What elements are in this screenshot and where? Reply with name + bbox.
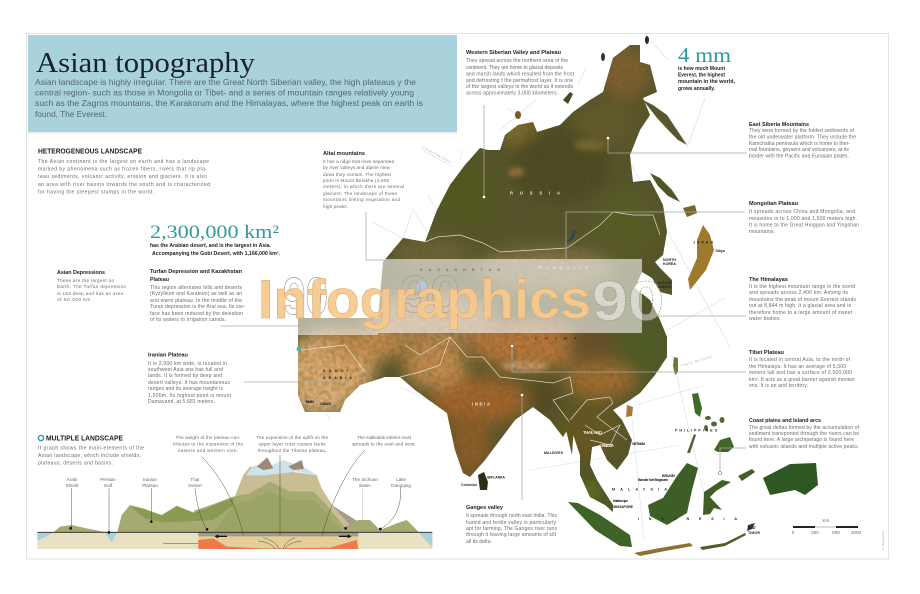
text block: East Siberia Mountains: the old underwater platform. They include the [749,134,856,140]
text block: Mongolian Plateau: Mongolian Plateau [749,201,798,207]
text block: Asian Depressions [57,270,126,302]
text block: Asian Depressions: of 50,000 km. [57,297,92,302]
map labels: RUSSIA [510,190,560,196]
intro text: central region- such as those in Mongolia or Tibet- and a series of mountain ranges relatively young [35,88,414,98]
callout: 4 mm: Everest, the highest [678,72,725,78]
text block: Ganges valley: It spreads through north east India. This [466,513,558,519]
borders and rivers [300,212,660,445]
text block: Turfan Depression: This region alternates hills and deserts [150,285,242,291]
text block: East Siberia Mountains [749,122,856,160]
scale bar [792,518,862,535]
text block: The Himalayas: water bodies. [749,316,781,322]
text block: heterogeneous landscape: marked by phenomena such as frozen fibers, rivers that rip pla- [38,166,207,172]
map labels: SINGAPORE [613,505,634,509]
text block: Western Siberian Valley and Plateau: and defrosting f the permafrost layer. It is one [466,78,573,84]
cross-section labels: Thar [190,477,200,482]
map labels [305,145,760,535]
text block: The Himalayas: out at 8,844 m high. It a glacial area and is [749,303,852,309]
text block: Ganges valley [466,505,558,545]
text block: Western Siberian Valley and Plateau: across approximately 3,000 kilometers. [466,90,558,96]
map labels: INDIA [472,402,490,406]
text block: Iranian Plateau: lands. It is formed by deep and [148,373,222,379]
panel: multiple landscape [37,435,432,549]
callouts: spreads to the east and west. [352,442,416,446]
text block: Iranian Plateau: southwest Asia ans has full arid [148,367,223,373]
heading: multiple landscape: MULTIPLE LANDSCAPE [46,436,123,442]
map labels: KAZAKHSTAN [420,268,500,272]
text block: Ganges valley: humid and fertile valley is particularly [466,520,556,526]
text block: Asian Depressions: Asian Depressions [57,270,105,276]
text block: East Siberia Mountains: East Siberia Mountains [749,122,809,128]
text block: Altai mountains: by river valleys and alpine mea- [323,165,391,170]
text block: Ganges valley: apt for farming. The Ganges river runs [466,526,558,532]
text block: Coast plains and Island arcs: sediment transported through the rivers can be [749,431,859,437]
text block: Turfan Depression: of its waters to irrigation canals. [150,317,226,323]
map labels: VIETNAM [632,442,645,446]
text block: Turfan Depression: Turfan Depression and Kazakhstan [150,269,243,275]
text block: Turfan Depression: Plateau [150,277,169,283]
text block: Altai mountains: dows they contain. The highest [323,172,392,177]
text block: Turfan Depression: (Kyzylkum and Karakum) as well as an [150,291,242,297]
text block: The Himalayas: therefore home to a large amount of sweet [749,310,853,316]
callout: 4 mm: grows annually. [678,86,716,92]
text block: heterogeneous landscape: The Asian continent is the largest on earth and has a landscape [38,159,209,165]
text block: Mongolian Plateau: measures in to 1,000 and 1,500 meters high. [749,216,857,222]
icon: teal bullet [38,435,44,441]
callout: 4 mm: 4 mm [678,43,731,67]
leader lines [221,105,747,500]
callouts: throughout the Tibetan plateau. [258,448,326,453]
text block: Coast plains and Island arcs: Coast plains and Island arcs [749,418,821,424]
map labels: Trópico de Cáncer [680,354,714,368]
intro text: found, The Everest. [35,109,107,119]
callout: 2,300,000 km2: has the Arabian desert, and is the largest in Asia. [150,243,272,249]
text block: Tibet Plateau: meters tall and has a surface of 2,500,000 [749,370,852,376]
text block: Western Siberian Valley and Plateau [466,50,575,96]
text block: East Siberia Mountains: mal fountains, geysers and volcanoes, at its [749,147,850,153]
cross-section labels: Iranian [143,477,157,482]
map labels: MONGOLIA [538,265,588,270]
callout: 4 mm: is how much Mount [678,66,725,72]
text block: Ganges valley: through it leaving large amounts of silt [466,532,557,538]
callouts [173,435,416,453]
text block: Coast plains and Island arcs: The great deltas formed by the accumulation of [749,425,860,431]
text block: heterogeneous landscape: HETEROGENEOUS LANDSCAPE [38,148,142,156]
text block: Western Siberian Valley and Plateau: They spread across the northern area of the [466,58,568,64]
map labels: CAMBODIA [600,443,614,448]
cross-section labels: Shield [66,483,79,488]
text block: Iranian Plateau: Iranian Plateau [148,352,188,358]
description: Asian landscape, which include shields, [38,453,141,459]
map labels: YEMEN [305,400,314,404]
text block: heterogeneous landscape [38,148,210,196]
map labels: CHINA [535,336,577,340]
text block: Coast plains and Island arcs [749,418,860,450]
text block: Tibet Plateau: Tibet Plateau [749,350,784,356]
map labels: MALAYSIA [612,488,667,492]
cross-section labels: The Sichuan [352,477,378,482]
cross-section labels: Gulf [104,483,113,488]
text block: Altai mountains: high peaks. [323,204,348,209]
cross-section labels: Desert [188,483,202,488]
text block: East Siberia Mountains: border with the Pacific and Eurasian plates. [749,154,849,160]
callouts: The weight of the plateau con- [176,435,241,440]
map labels: KOREA [663,262,676,266]
text block: Turfan Depression [150,269,245,323]
text block: East Siberia Mountains: Kamchatka peninsula which is home to ther- [749,141,850,147]
text block: Western Siberian Valley and Plateau: continent. They are home to glacial deposits [466,65,564,71]
text block: Altai mountains: It has a ridge that rises separated [323,159,394,164]
text block: Tibet Plateau: ons. It is an arid territory. [749,383,808,389]
map labels: Círculo Polar Ártico [422,145,452,164]
text block: Iranian Plateau: desert valleys. It has mountainous [148,380,230,386]
cross-section labels: Persian [100,477,116,482]
callouts: tributes to the expansion of the [173,442,243,446]
description [38,446,144,466]
text block: Iranian Plateau: ranges and its average height is [148,386,224,392]
callouts: The malleable inferior crust [357,435,412,440]
map labels: BRUNEI [662,474,675,478]
scale bar: Km [823,518,830,523]
intro text [35,77,423,119]
callout: 2,300,000 km2: 2,300,000 km² [150,222,279,243]
map labels: PHILIPPINES [675,428,718,432]
callouts: The expansion of the uplift on the [256,435,328,440]
text block: The Himalayas: The Himalayas [749,277,788,283]
text block: Coast plains and Island arcs: found here. A large archipelago is found here [749,437,854,443]
panel: title box [28,35,457,132]
text block: Asian Depressions: is 154 deep and has an area [57,291,123,296]
watermark band: Infographics [258,268,591,330]
text block: Iranian Plateau: It is 2,000 km wide, is located in [148,361,227,367]
text block: The Himalayas: and spreads across 2,400 km. Among its [749,290,848,296]
graticule lines [300,40,730,540]
map labels: Bandar Seri Begawan [638,478,668,482]
cross-section labels: Plateau [142,483,158,488]
watermark band [258,259,664,335]
land colour relief [298,45,672,512]
scale bar: 0 [792,530,795,535]
text block: Western Siberian Valley and Plateau: of the largest valleys in the world as it extends [466,84,574,90]
callout: 4 mm [678,43,736,92]
map labels: SOUTH [658,281,671,285]
text block: Asian Depressions: Earth. The Turfan depression [57,284,126,289]
callout: 2,300,000 km2: Accompanying the Gobi Desert, with 1,166,000 km². [152,251,281,257]
map labels: INDONESIA [638,517,737,521]
scale bar: 250 [811,530,819,535]
watermark band: 90 [592,269,664,332]
scale bar: 500 [832,530,840,535]
text block: Turfan Depression: face has been reduced by the deviation [150,311,243,317]
map labels: TIMOR [748,531,760,535]
map of Asia [285,36,818,556]
text block: Coast plains and Island arcs: with volcanic islands and multiple active peaks. [749,444,859,450]
map labels: Kuala Lumpur [613,499,629,503]
text block: Western Siberian Valley and Plateau: Western Siberian Valley and Plateau [466,50,561,56]
text block: Altai mountains: point is Mount Belukha (4,506 [323,178,389,183]
text block: Turfan Depression: arid warm plateau. In the middle of the [150,298,242,304]
map labels: OMAN [320,402,331,406]
icon: Lake Baikal [568,230,575,241]
text block: Altai mountains: glaciers. The landscape of these [323,191,397,196]
callout: 4 mm: mountain in the world, [678,79,736,85]
callout: 2,300,000 km2 [150,222,281,257]
text block: heterogeneous landscape: an area with river basins towards the south and is characterized [38,182,210,188]
text block: Western Siberian Valley and Plateau: and marsh lands which resulted from the frost [466,72,575,78]
map labels: THAILAND [583,430,602,435]
text block: Tibet Plateau: km². It acts as a great barrier against monsor [749,377,855,383]
map labels: SAUDI [323,369,348,373]
text block: Altai mountains: meters), in which there are several [323,184,404,189]
text block: Tibet Plateau [749,350,855,389]
text block: heterogeneous landscape: for having the steepest slumps in the world. [38,190,154,196]
watermark band: 90 [400,266,460,324]
text block: Turfan Depression: Turan depression is the Aral sea. Its sur- [150,304,245,310]
intro text: Asian landscape is highly irregular. There are the Great North Siberian valley, the high plateaus y the [35,77,416,87]
map labels: EAST [748,526,757,530]
map labels: Colombo [461,483,478,487]
text block: Tibet Plateau: the Himalaya. It has an average of 5,000 [749,364,846,370]
callouts: upper layer crust causes faults [258,442,326,446]
text block: Ganges valley: all its delta. [466,539,492,545]
text block: Altai mountains [323,151,404,209]
title: Asian topography [36,47,256,79]
text block: Altai mountains: Altai mountains [323,151,365,157]
text block: Iranian Plateau: Damavand, at 5,681 meters. [148,399,215,405]
text block: heterogeneous landscape: teau sediments, volcanic activity, erosion and glaciers. It is also [38,174,207,180]
text block: Mongolian Plateau [749,201,859,235]
cross-section labels: Arabi [67,477,77,482]
text block: Asian Depressions: These are the largest on [57,278,114,283]
watermark band: 90 [283,268,328,326]
cross-section diagram [37,450,432,549]
text block: Iranian Plateau: 1,500m. Its highest point is mount [148,393,232,399]
credit: © Infographics [881,530,885,550]
description: plateaus, deserts and basins. [38,460,113,466]
icon: Aral Sea [417,281,427,291]
map labels: SRI LANKA [487,476,505,480]
map labels: KOREA [658,285,671,289]
cross-section labels [66,477,411,546]
cross-section labels: Lake [396,477,406,482]
text block: Mongolian Plateau: mountains. [749,229,775,235]
cross-section labels: Mantle [149,541,163,546]
description: It graph shows the main-elements of the [38,446,144,452]
text block: Altai mountains: mountains linking vegetation and [323,197,400,202]
text block: The Himalayas [749,277,856,322]
text block: Iranian Plateau [148,352,232,405]
text block: The Himalayas: It is the highest mountain range in the world [749,284,855,290]
islands [478,36,818,556]
text block: Tibet Plateau: It is located in central Asia, to the north of [749,357,851,363]
cross-section labels: Basin [359,483,371,488]
map labels: MALDIVES [544,451,564,455]
map labels: Tokyo [715,249,726,253]
map labels: ARABIA [323,376,352,380]
text block: The Himalayas: mountains the peak of mount Everest stands [749,297,856,303]
scale bar: 1000 [851,530,862,535]
cross-section labels: Dangqing [391,483,411,488]
map labels: JAPAN [693,240,713,244]
text block: East Siberia Mountains: They were formed by the folded sediments of [749,128,855,134]
callouts: eastern and western core. [178,448,238,453]
text block: Ganges valley: Ganges valley [466,505,504,511]
text block: Mongolian Plateau: It is home to the Great Hinggan and Yingshan [749,222,859,228]
text block: Mongolian Plateau: It spreads across China and Mongolia, and [749,209,855,215]
map labels: NORTH [663,258,676,262]
intro text: such as the Zagros mountains, the Karakorum and the Himalayas, where the highest peak on earth is [35,98,423,108]
